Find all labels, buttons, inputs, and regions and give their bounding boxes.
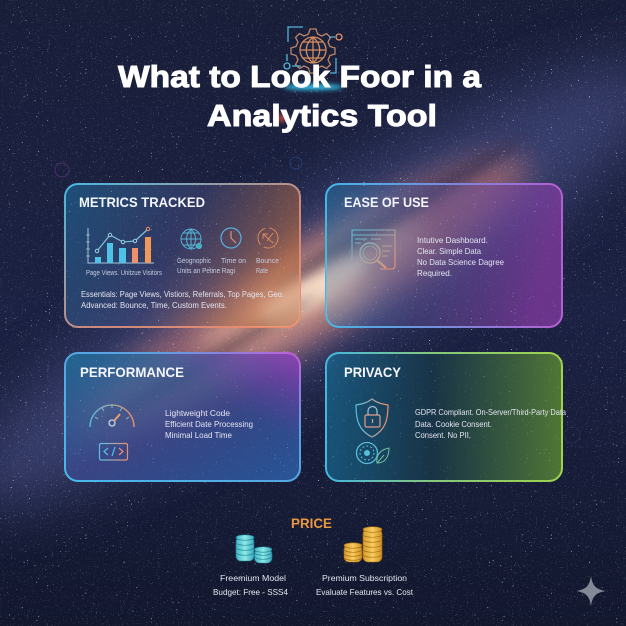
star overlay across panels: [65, 184, 562, 481]
ease of use text: Intutive Dashboard.: [417, 235, 488, 245]
performance text: [165, 408, 253, 440]
heading: price: PRICE: [291, 515, 332, 531]
section: price: [213, 515, 414, 597]
icon: code: [100, 444, 128, 460]
icon: globe pin: [181, 229, 202, 249]
privacy text: Data. Cookie Consent.: [415, 419, 492, 429]
privacy text: GDPR Compliant. On-Server/Third-Party Data: [415, 407, 566, 417]
ease of use text: No Data Science Dagree: [417, 257, 504, 267]
metric labels: Geognophic: [177, 258, 211, 265]
icon: gauge: [90, 404, 134, 427]
icon: teal coins: [236, 535, 272, 563]
price text: premium: [316, 573, 414, 597]
icon: gold coins: [344, 527, 382, 562]
privacy text: [415, 407, 566, 440]
performance text: Minimal Load Time: [165, 430, 232, 440]
icon: bounce: [258, 228, 278, 248]
decorative glow rings: [55, 157, 580, 443]
panel: privacy: [326, 353, 566, 481]
privacy text: Consent. No PII.: [415, 430, 471, 440]
price text: freemium: [213, 573, 288, 597]
title glow: [276, 84, 343, 122]
metric labels: Bounce: [256, 258, 279, 265]
icon: gear globe: [284, 27, 342, 73]
performance text: Lightweight Code: [165, 408, 230, 418]
price text: freemium: Budget: Free - SSS4: [213, 587, 288, 597]
performance text: Efficient Date Processing: [165, 419, 253, 429]
title: What to Look Foor in a: [118, 59, 482, 94]
metric labels: [177, 258, 279, 275]
panel: ease of use: [325, 183, 563, 328]
metrics text: Advanced: Bounce, Time, Custom Events.: [81, 300, 227, 310]
heading: ease of use: EASE OF USE: [344, 194, 429, 210]
icon: clock: [221, 228, 241, 248]
panel: metrics tracked: [64, 183, 301, 328]
metric labels: Rate: [256, 268, 268, 275]
chart: bars and line: [86, 227, 154, 263]
metric labels: Units an Petine Ragi: [177, 268, 235, 275]
icon: dashboard magnifier: [352, 230, 395, 269]
icon: data leaf: [356, 442, 389, 464]
heading: metrics tracked: METRICS TRACKED: [79, 194, 205, 210]
title: [118, 59, 482, 133]
metrics text: Essentials: Page Views, Vistiors, Referrals, Top Pages, Geo.: [81, 289, 284, 299]
core glow through panel: [326, 247, 376, 327]
metrics text: [81, 289, 284, 310]
price text: premium: Evaluate Features vs. Cost: [316, 587, 414, 597]
metric labels: Time on: [221, 258, 246, 265]
ease of use text: Clear. Simple Data: [417, 246, 481, 256]
price text: freemium: Freemium Model: [220, 573, 286, 583]
ease of use text: Required.: [417, 268, 452, 278]
icon: shield lock: [356, 399, 388, 437]
ease of use text: [417, 235, 504, 278]
heading: privacy: PRIVACY: [344, 364, 402, 380]
panel: performance: [65, 353, 300, 481]
chart label: Page Views. Unitzue Visitors: [86, 270, 162, 277]
price text: premium: Premium Subscription: [322, 573, 407, 583]
heading: performance: PERFORMANCE: [80, 364, 184, 380]
title: Analytics Tool: [207, 98, 437, 133]
core glow through panel: [246, 266, 300, 327]
icon: sparkle: [576, 576, 606, 606]
